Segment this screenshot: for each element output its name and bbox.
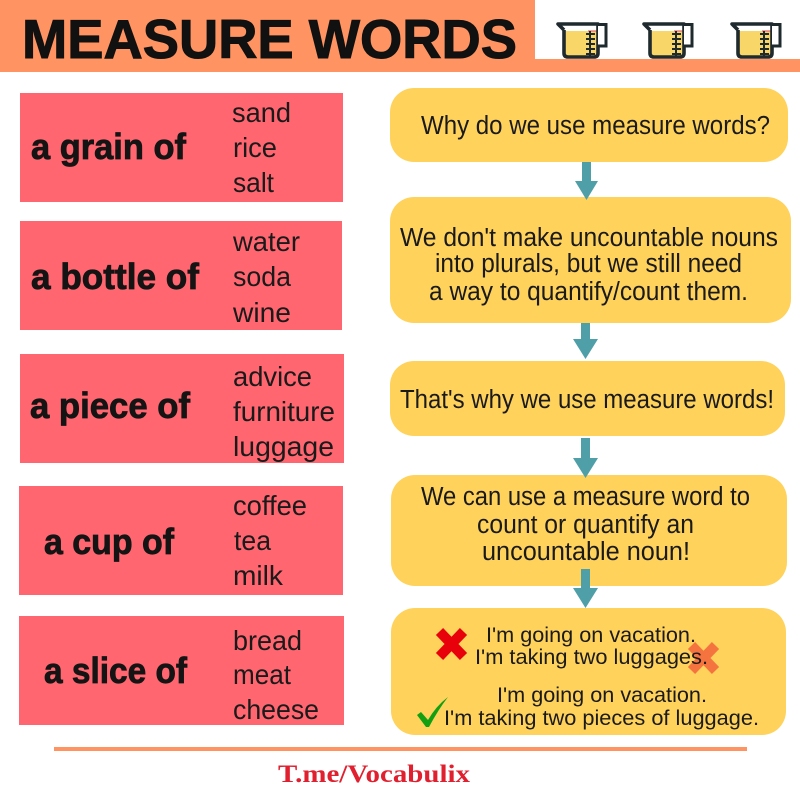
arrow 2 [573, 323, 598, 359]
panel: a bottle of [20, 221, 342, 330]
callout: count or quantify: uncountable noun! [482, 538, 690, 566]
panel: a slice of [19, 616, 344, 725]
footer link: T.me/Vocabulix [278, 761, 471, 788]
panel: a piece of: advice [233, 361, 312, 392]
callout: examples: I'm taking two pieces of luggage. [444, 707, 759, 730]
panel: a grain of: a grain of [31, 126, 187, 167]
title: MEASURE WORDS [22, 8, 517, 70]
callout: examples: I'm taking two luggages. [475, 646, 708, 669]
panel: a bottle of: water [232, 226, 300, 257]
panel: a bottle of: wine [232, 297, 291, 328]
callout: uncountable nouns explanation: We don't make uncountable nouns [400, 224, 778, 252]
panel: a grain of: salt [233, 167, 274, 198]
panel: a slice of: a slice of [44, 650, 188, 691]
panel: a cup of [19, 486, 343, 595]
icon: measuring cup 1 [558, 24, 606, 58]
callout: examples: I'm going on vacation. [486, 624, 696, 647]
panel: a piece of: furniture [233, 396, 335, 427]
callout: examples [391, 608, 786, 735]
callout: that's why [390, 361, 785, 436]
icon: measuring cup 2 [644, 24, 692, 58]
callout: why do we use measure words: Why do we use measure words? [421, 112, 770, 140]
callout: uncountable nouns explanation: a way to quantify/count them. [429, 278, 748, 306]
icon: green check [417, 697, 448, 727]
callout: count or quantify: We can use a measure word to [421, 483, 750, 511]
callout: examples: I'm going on vacation. [497, 684, 707, 707]
header banner [0, 0, 800, 72]
callout: uncountable nouns explanation [390, 197, 791, 323]
panel: a grain of: sand [232, 97, 291, 128]
arrow 1 [575, 162, 598, 200]
panel: a slice of: meat [233, 659, 291, 690]
panel: a piece of: a piece of [30, 385, 191, 426]
panel: a cup of: milk [233, 560, 284, 591]
panel: a cup of: tea [234, 525, 271, 556]
panel: a grain of: rice [233, 132, 277, 163]
icon: orange cross [692, 646, 716, 670]
panel: a bottle of: a bottle of [31, 256, 200, 297]
panel: a grain of [20, 93, 343, 202]
icon: measuring cup 3 [732, 24, 780, 58]
icon: red cross [440, 632, 464, 656]
callout: count or quantify [391, 475, 787, 586]
panel: a slice of: cheese [233, 694, 319, 725]
panel: a slice of: bread [233, 625, 302, 656]
footer divider [54, 747, 747, 751]
panel: a cup of: coffee [233, 490, 307, 521]
panel: a piece of: luggage [233, 431, 334, 462]
panel: a cup of: a cup of [44, 521, 175, 562]
callout: that's why: That's why we use measure words! [400, 386, 774, 414]
callout: uncountable nouns explanation: into plurals, but we still need [435, 250, 742, 278]
callout: count or quantify: count or quantify an [477, 511, 694, 539]
panel: a bottle of: soda [233, 261, 291, 292]
arrow 4 [573, 569, 598, 608]
arrow 3 [573, 438, 598, 478]
panel: a piece of [20, 354, 344, 463]
callout: why do we use measure words [390, 88, 788, 162]
